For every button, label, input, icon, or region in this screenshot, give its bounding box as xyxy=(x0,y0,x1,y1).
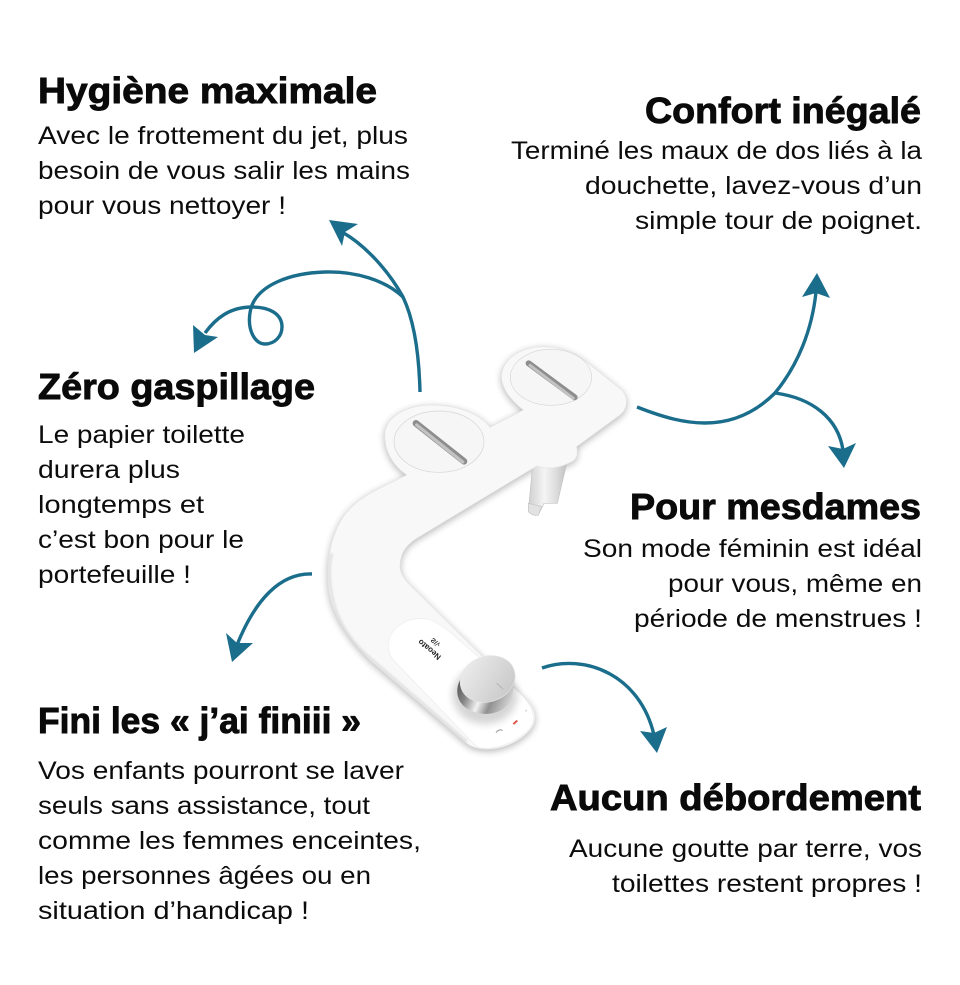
heading: Zéro gaspillage: Zéro gaspillage xyxy=(38,366,315,407)
arrow: down to Fini les j'ai finiii xyxy=(226,574,312,662)
text block: Pour mesdames description: période de menstrues ! xyxy=(634,605,922,633)
text block: Hygiène maximale description: besoin de vous salir les mains xyxy=(38,157,410,185)
left mounting pad xyxy=(394,411,484,472)
text block: Fini les description xyxy=(38,757,421,925)
arrow: up to Confort inégalé xyxy=(637,273,830,423)
brand logo xyxy=(416,630,449,662)
panel: Zéro gaspillage xyxy=(38,366,315,589)
text block: Hygiène maximale description xyxy=(38,122,410,220)
mode icons xyxy=(496,710,527,733)
heading: Confort inégalé: Confort inégalé xyxy=(645,90,921,131)
text block: Aucun débordement description xyxy=(569,835,922,898)
underside lip shading xyxy=(329,553,467,742)
arrow: down to Pour mesdames xyxy=(775,393,856,468)
heading: Hygiène maximale: Hygiène maximale xyxy=(38,70,377,111)
panel: Fini les j'ai finiii xyxy=(38,700,421,925)
heading: Aucun débordement: Aucun débordement xyxy=(550,777,921,818)
text block: Zéro gaspillage description: Le papier toilette xyxy=(38,421,245,449)
text block: Zéro gaspillage description: durera plus xyxy=(38,456,180,484)
text block: Hygiène maximale description: pour vous nettoyer ! xyxy=(38,192,286,220)
text block: Fini les description: Vos enfants pourront se laver xyxy=(38,757,404,785)
text block: Aucun débordement description: Aucune goutte par terre, vos xyxy=(569,835,922,863)
right mounting pad xyxy=(510,349,592,405)
panel: Pour mesdames xyxy=(583,486,922,633)
text block: Confort inégalé description xyxy=(511,137,922,235)
text block: Pour mesdames description xyxy=(583,535,922,633)
text block: Pour mesdames description: Son mode féminin est idéal xyxy=(583,535,922,563)
text block: Hygiène maximale description: Avec le frottement du jet, plus xyxy=(38,122,408,150)
heading: Fini les « j’ai finiii »: Fini les « j’ai finiii » xyxy=(38,700,361,741)
control plate xyxy=(388,618,533,748)
panel: Hygiène maximale xyxy=(38,70,410,220)
shadow under the device xyxy=(328,349,626,751)
silver knob xyxy=(454,648,522,714)
text block: Confort inégalé description: Terminé les maux de dos liés à la xyxy=(511,137,922,165)
text block: Zéro gaspillage description xyxy=(38,421,245,589)
text block: Aucun débordement description: toilettes restent propres ! xyxy=(612,870,922,898)
text block: Fini les description: comme les femmes enceintes, xyxy=(38,827,421,855)
text block: Fini les description: situation d’handicap ! xyxy=(38,897,309,925)
arrow: down to Aucun débordement xyxy=(542,663,667,753)
text block: Zéro gaspillage description: c’est bon pour le xyxy=(38,526,244,554)
arrow: up to Hygiène maximale xyxy=(329,220,420,392)
arrow: looping to Zéro gaspillage xyxy=(193,272,403,353)
text block: Fini les description: seuls sans assistance, tout xyxy=(38,792,370,820)
text block: Confort inégalé description: douchette, lavez-vous d’un xyxy=(585,172,922,200)
text block: Pour mesdames description: pour vous, même en xyxy=(668,570,922,598)
text block: Zéro gaspillage description: portefeuille ! xyxy=(38,561,191,589)
panel: Confort inégalé xyxy=(511,90,922,235)
knob shadow xyxy=(452,666,518,724)
text block: Zéro gaspillage description: longtemps et xyxy=(38,491,204,519)
text block: Confort inégalé description: simple tour de poignet. xyxy=(635,207,922,235)
water valve xyxy=(528,457,568,515)
brand logo: √/Ƨ xyxy=(429,636,442,648)
text block: Fini les description: les personnes âgées ou en xyxy=(38,862,371,890)
product: white bidet attachment xyxy=(328,347,626,751)
heading: Pour mesdames: Pour mesdames xyxy=(630,486,921,527)
brand logo: Neoato xyxy=(416,637,443,662)
device body xyxy=(328,347,626,749)
panel: Aucun débordement xyxy=(550,777,922,898)
